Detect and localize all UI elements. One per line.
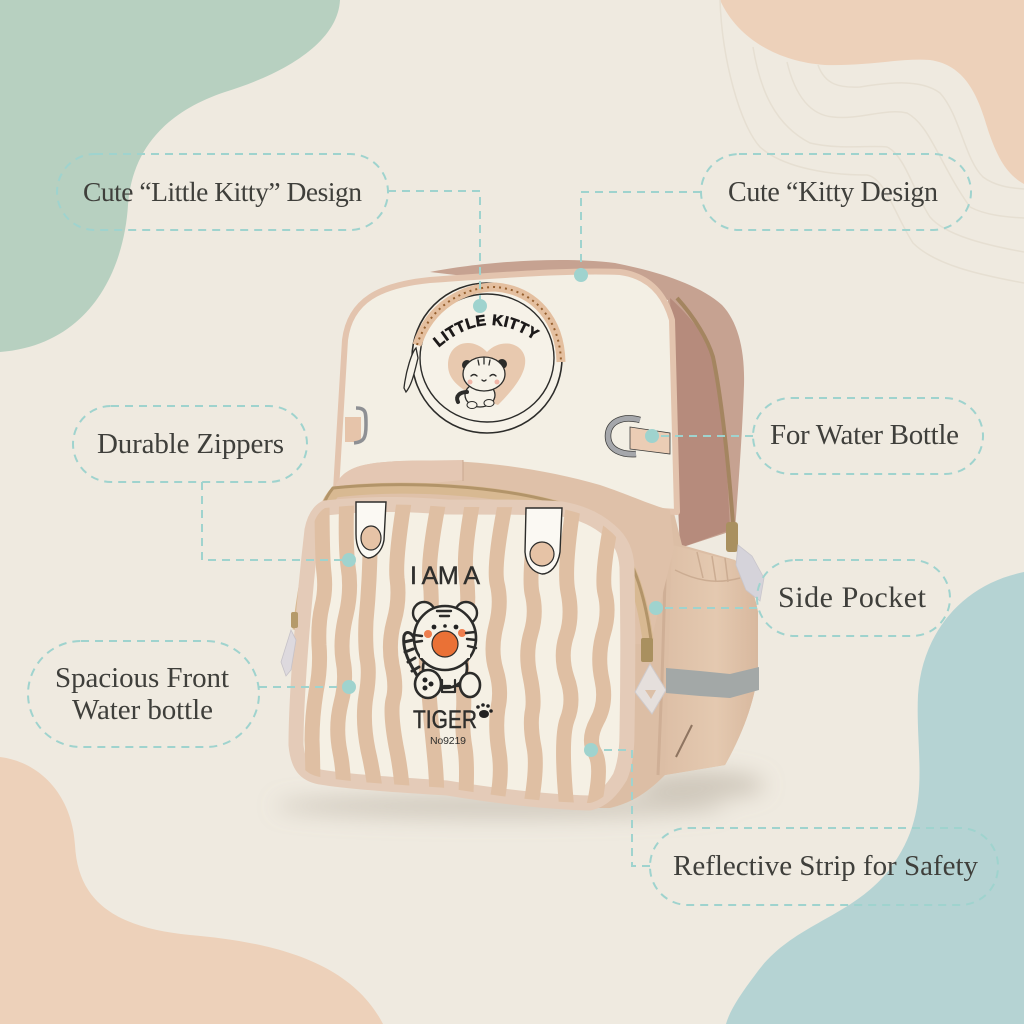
paw print icon — [476, 703, 493, 718]
callout: Side Pocket: Side Pocket — [778, 581, 927, 614]
ground shadow — [275, 771, 765, 818]
pocket wavy stripes — [312, 490, 616, 810]
callout: Durable Zippers — [73, 406, 356, 567]
side zipper pull — [726, 522, 764, 601]
back and side rose panel — [430, 260, 744, 548]
little kitty emblem — [403, 282, 566, 434]
callout: Cute Little Kitty Design — [57, 154, 487, 313]
pocket piping — [296, 504, 628, 803]
callout: Cute Kitty Design — [574, 154, 971, 282]
right zipper pull — [635, 638, 666, 714]
background blob: peach bottom-left — [0, 757, 383, 1024]
contour lines top-right — [720, 0, 1024, 283]
pocket tab right — [525, 508, 562, 574]
pocket text: TIGER: TIGER — [413, 706, 477, 734]
emblem heart — [448, 343, 525, 405]
callout: Durable Zippers: Durable Zippers — [97, 428, 284, 460]
background blob: blue bottom-right — [726, 572, 1024, 1024]
callout: Cute Kitty Design: Cute “Kitty Design — [728, 177, 938, 208]
lower body and side pocket — [560, 480, 758, 808]
front upper cream panel — [336, 272, 677, 512]
emblem kitty — [457, 357, 507, 408]
tiger illustration — [404, 602, 480, 698]
background blob: green top-left — [0, 0, 340, 352]
left D-ring strap — [345, 408, 366, 443]
front striped pocket — [296, 490, 628, 810]
emblem arc title: LITTLE KITTY — [432, 314, 540, 348]
pocket text: I AM A: I AM A — [410, 562, 480, 590]
callout: Cute Little Kitty Design: Cute “Little Kitty” Design — [83, 176, 362, 207]
callout: For Water Bottle: For Water Bottle — [770, 419, 959, 451]
callout: Spacious Front Water bottle: Water bottle — [72, 694, 213, 726]
emblem rings — [412, 283, 562, 433]
backpack illustration — [280, 260, 764, 826]
callout: Reflective Strip for Safety: Reflective Strip for Safety — [673, 850, 978, 882]
pocket tab left — [356, 502, 386, 558]
pocket text: model number: No9219 — [430, 735, 466, 747]
callout: Spacious Front Water bottle — [28, 641, 356, 747]
background blob: peach top-right — [720, 0, 1024, 184]
callout: Reflective Strip for Safety — [584, 743, 998, 905]
emblem zipper band — [404, 287, 561, 392]
right D-ring strap — [608, 418, 670, 454]
callout: For Water Bottle — [645, 398, 983, 474]
front pocket zipper — [296, 485, 651, 640]
callout: Spacious Front Water bottle: Spacious Front — [55, 662, 229, 694]
reflective strip — [666, 667, 759, 698]
callout: Side Pocket — [649, 560, 950, 636]
left zipper pull — [281, 612, 298, 676]
middle tan panel — [300, 460, 674, 645]
